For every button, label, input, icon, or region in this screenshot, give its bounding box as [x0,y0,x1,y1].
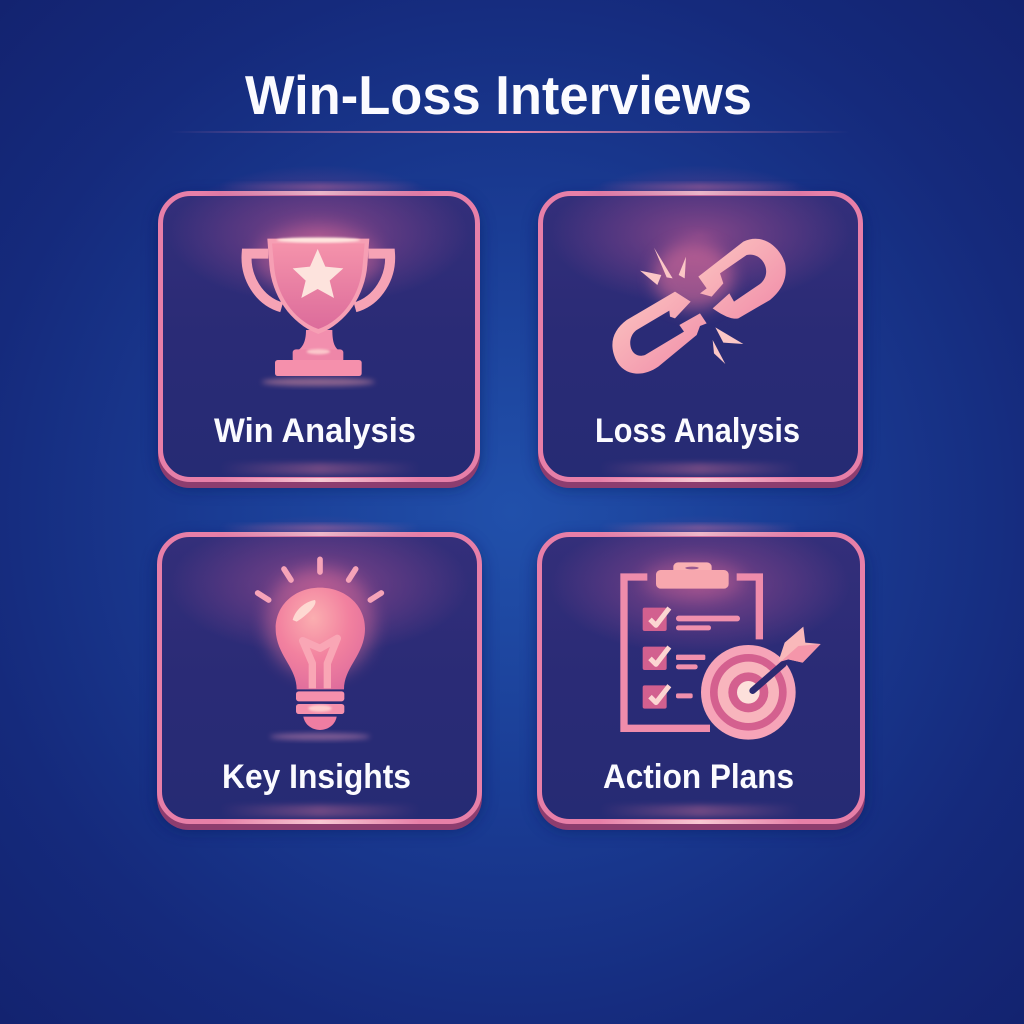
icon: star [293,249,343,298]
panel: loss analysis [538,165,863,488]
icon: clipboard [624,562,759,728]
icon: lower link half [612,292,707,374]
icon: light bulb [258,559,381,740]
title: Win-Loss Interviews [245,64,752,126]
panel: key insights [157,515,482,830]
icon: broken chain link [612,239,786,374]
title underline [170,131,850,133]
icon: upper link half [698,239,786,319]
label: win analysis: Win Analysis [214,412,416,450]
icon: sparks [640,248,743,364]
icon: clipboard with target [624,560,821,740]
label: key insights: Key Insights [222,758,411,796]
panel: action plans [537,515,865,830]
panel: win analysis [158,165,480,488]
label: loss analysis: Loss Analysis [595,412,800,450]
icon: trophy [247,227,390,386]
label: action plans: Action Plans [603,758,794,796]
icon: target with arrow [701,627,821,740]
icon: bulb rays [258,559,381,600]
